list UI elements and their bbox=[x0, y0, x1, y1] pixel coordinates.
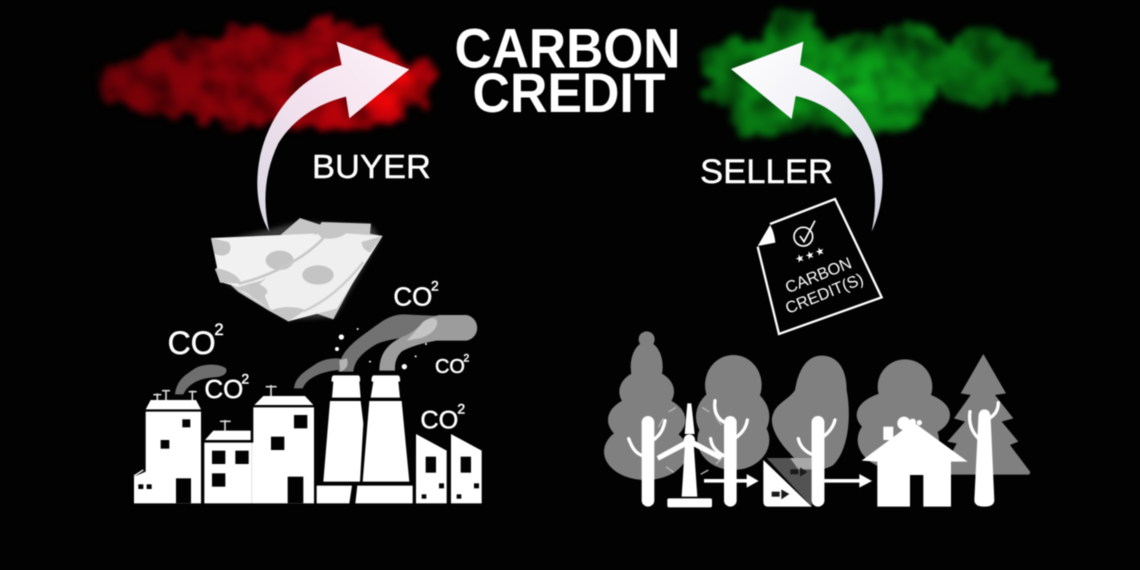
label: seller: SELLER bbox=[700, 153, 833, 191]
arrow: buyer bbox=[257, 42, 409, 232]
solar panel bbox=[763, 458, 812, 507]
illustration: polluting city bbox=[134, 278, 482, 503]
arrow to house bbox=[824, 474, 872, 488]
co2 labels: CO bbox=[393, 281, 432, 311]
wind turbine bbox=[657, 403, 723, 507]
co2 labels bbox=[168, 278, 469, 435]
co2 labels: CO bbox=[204, 374, 243, 404]
stars: ★ bbox=[804, 248, 817, 263]
co2 labels: 2 bbox=[241, 370, 249, 386]
icon: carbon credits certificate bbox=[758, 199, 882, 334]
certificate text: CREDIT(S) bbox=[783, 270, 866, 318]
stars: ★ bbox=[814, 245, 827, 259]
house bbox=[862, 417, 968, 507]
tree canopies bbox=[604, 331, 1030, 480]
pollution particles bbox=[335, 328, 427, 369]
antennas bbox=[153, 385, 277, 431]
buildings bbox=[134, 396, 482, 503]
icon: money notes bbox=[211, 218, 383, 321]
arrow: seller bbox=[731, 42, 883, 232]
co2 labels: CO bbox=[420, 407, 458, 435]
title line: credit: CREDIT bbox=[472, 61, 666, 124]
stars: ★ bbox=[794, 252, 807, 266]
co2 labels: 2 bbox=[457, 400, 465, 416]
red cloud bbox=[97, 22, 435, 129]
tree trunks bbox=[642, 409, 994, 507]
smoke plumes bbox=[175, 314, 477, 394]
co2 labels: 2 bbox=[214, 320, 224, 339]
co2 labels: 2 bbox=[431, 278, 439, 294]
arrow to panel bbox=[704, 474, 759, 488]
title line: carbon: CARBON bbox=[454, 16, 680, 80]
green cloud bbox=[702, 12, 1052, 136]
turbine motion arcs bbox=[658, 407, 722, 474]
middle tree trunk front bbox=[812, 416, 824, 507]
windows and doors bbox=[138, 415, 479, 503]
illustration: forest with renewable energy bbox=[604, 331, 1030, 507]
tree branches bbox=[629, 401, 998, 457]
co2 labels: CO bbox=[435, 356, 465, 378]
co2 labels: 2 bbox=[463, 353, 469, 365]
co2 labels: CO bbox=[168, 325, 216, 361]
check badge bbox=[794, 221, 815, 246]
stars bbox=[794, 245, 827, 266]
certificate text: CARBON bbox=[783, 254, 854, 297]
cooling towers bbox=[317, 375, 413, 503]
label: buyer: BUYER bbox=[312, 148, 431, 185]
title bbox=[454, 16, 680, 124]
